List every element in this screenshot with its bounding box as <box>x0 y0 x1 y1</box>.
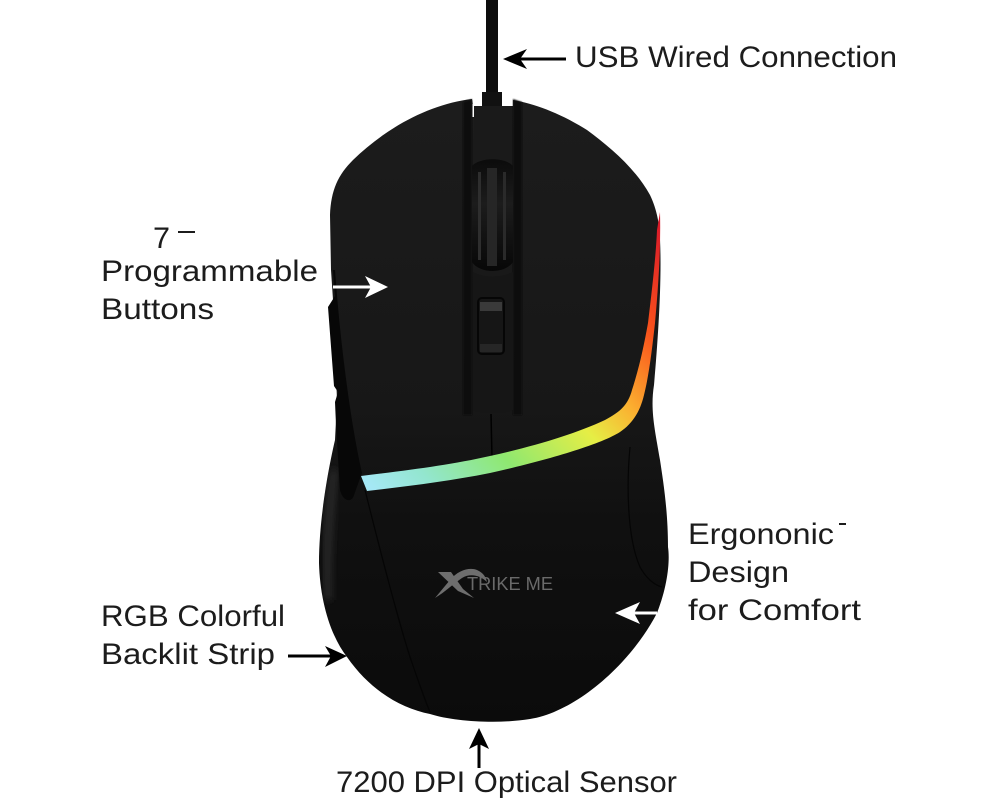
arrow: programmable buttons <box>333 276 388 298</box>
label: RGB strip: RGB Colorful <box>101 600 285 633</box>
label: programmable buttons <box>101 222 318 326</box>
arrow: RGB strip <box>288 646 347 667</box>
label: programmable buttons: Programmable <box>101 255 318 288</box>
label: RGB strip <box>101 600 285 671</box>
left highlight <box>324 470 337 600</box>
side buttons <box>328 270 362 500</box>
label: RGB strip: Backlit Strip <box>101 638 275 671</box>
label: ergonomic design <box>688 518 862 627</box>
scroll wheel <box>472 159 513 271</box>
label: ergonomic design: for Comfort <box>688 594 862 627</box>
label: optical sensor: 7200 DPI Optical Sensor <box>336 766 677 799</box>
mouse body <box>319 99 669 722</box>
infographic: mouse features <box>104 0 895 798</box>
arrow: USB <box>503 49 566 69</box>
label: programmable buttons: 7 <box>153 222 170 255</box>
label: ergonomic design: Design <box>688 556 789 589</box>
logo <box>435 569 553 598</box>
arrow: ergonomic design <box>615 602 657 624</box>
arrow: optical sensor <box>469 728 489 768</box>
label: programmable buttons: Buttons <box>101 293 214 326</box>
DPI button <box>478 298 504 354</box>
seam lines <box>491 414 492 458</box>
centre channel <box>463 99 472 415</box>
logo: TRIKE ME <box>467 574 553 594</box>
label: ergonomic design: Ergononic <box>688 518 834 551</box>
cable <box>482 0 502 108</box>
label: USB wired connection: USB Wired Connection <box>575 41 897 74</box>
RGB backlit strip <box>361 212 660 491</box>
